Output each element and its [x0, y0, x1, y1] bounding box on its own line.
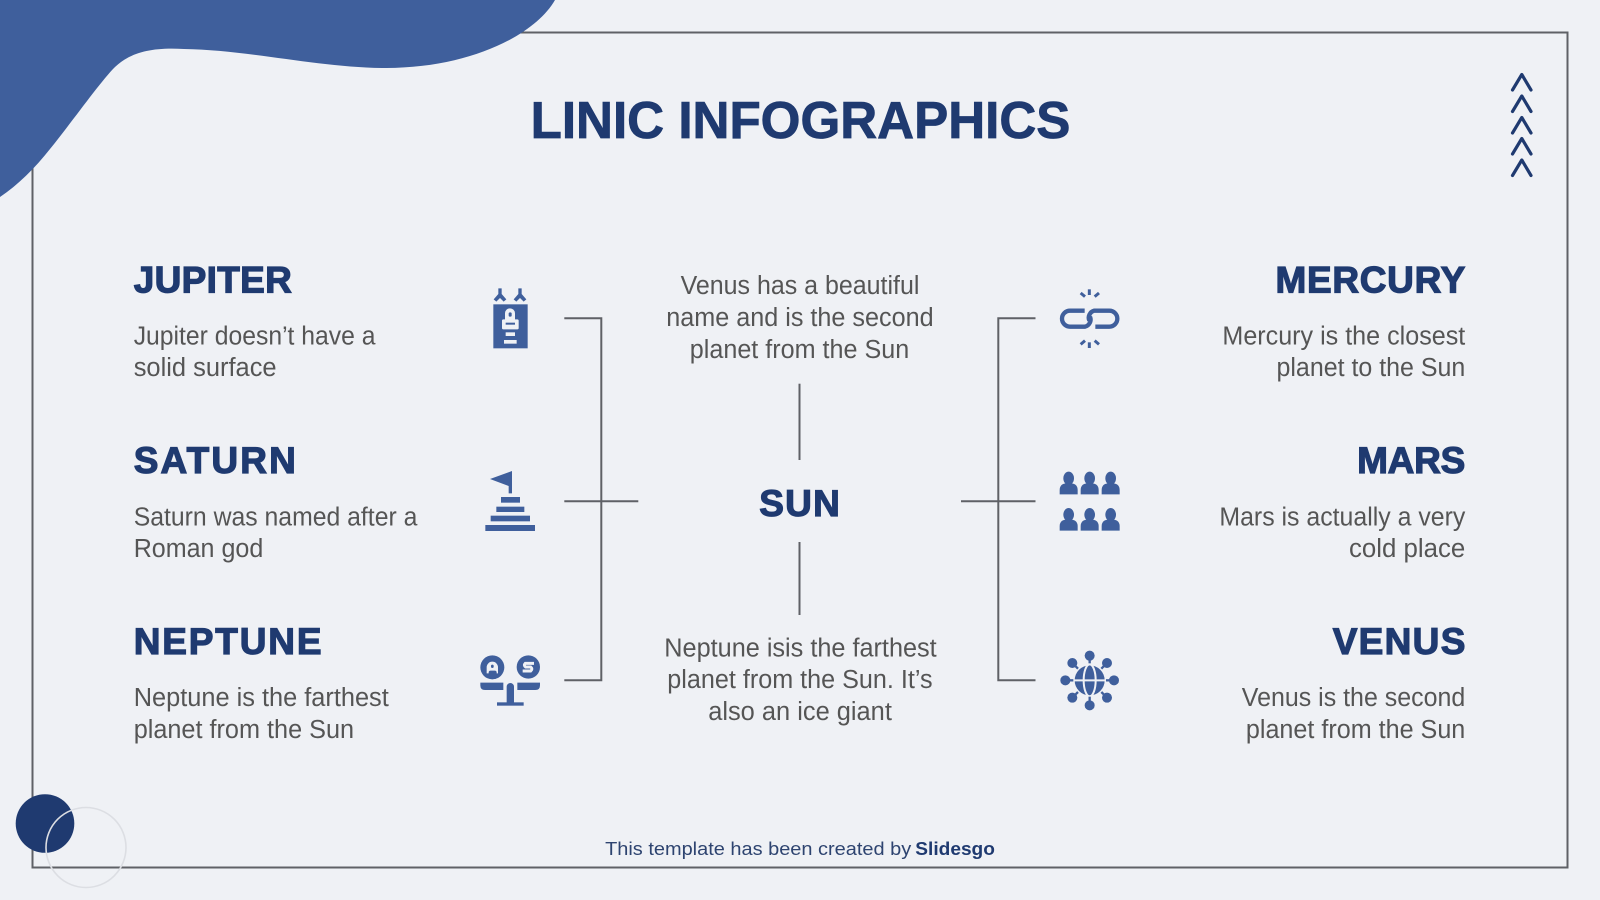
panel: Mercury: Mercury is the closest: [1222, 322, 1465, 350]
panel: Saturn: SATURN: [134, 440, 296, 481]
icon: people group: [1060, 472, 1120, 531]
panel: Mars: MARS: [1357, 440, 1465, 481]
icon: broken link: [1062, 289, 1117, 348]
panel: Neptune: NEPTUNE: [134, 621, 322, 662]
panel: Neptune: planet from the Sun: [134, 716, 354, 744]
footer credit: This template has been created by: [605, 839, 911, 859]
panel: Jupiter: solid surface: [134, 354, 277, 382]
connector: right bracket: [961, 318, 1036, 680]
connector: left bracket: [564, 318, 638, 680]
title: LINIC INFOGRAPHICS: [531, 92, 1070, 150]
decorative blue blob: [0, 0, 555, 197]
text block: center bottom: planet from the Sun. It’s: [667, 666, 933, 694]
panel: Jupiter: JUPITER: [134, 260, 292, 300]
text block: center bottom: [664, 634, 937, 726]
panel: Mars: cold place: [1349, 535, 1465, 563]
decorative dark circle: [16, 794, 74, 853]
text block: center bottom: also an ice giant: [708, 698, 892, 726]
panel: Saturn: [134, 440, 418, 563]
icon: flag podium: [485, 471, 535, 531]
text block: center top: [666, 272, 934, 364]
panel: Mercury: MERCURY: [1276, 260, 1466, 300]
text block: center top: Venus has a beautiful: [681, 272, 919, 300]
panel: Neptune: [134, 621, 389, 744]
footer credit: Slidesgo: [915, 839, 995, 859]
decorative outline circle: [46, 808, 126, 888]
text block: center bottom: Neptune isis the farthest: [664, 634, 937, 662]
panel: Venus: [1242, 621, 1465, 744]
panel: Neptune: Neptune is the farthest: [134, 684, 389, 712]
panel: Jupiter: [134, 260, 376, 382]
panel: Jupiter: Jupiter doesn’t have a: [134, 322, 376, 350]
panel: Mercury: [1222, 260, 1466, 382]
panel: Saturn: Saturn was named after a: [134, 504, 418, 532]
icon: balance scale: [480, 655, 540, 706]
icon: chevrons: [1512, 74, 1531, 176]
panel: Mars: Mars is actually a very: [1219, 504, 1466, 532]
icon: globe network: [1060, 651, 1119, 710]
panel: Venus: planet from the Sun: [1246, 716, 1465, 744]
panel: Mars: [1219, 440, 1466, 563]
icon: badge: [493, 288, 528, 348]
panel: Venus: VENUS: [1333, 621, 1465, 662]
connector: center top line: [798, 384, 800, 460]
panel: Mercury: planet to the Sun: [1276, 354, 1465, 382]
connector: center bottom line: [798, 542, 800, 615]
text block: center top: name and is the second: [666, 304, 934, 332]
heading: Sun: SUN: [759, 483, 840, 524]
text block: center top: planet from the Sun: [690, 336, 909, 364]
panel: Venus: Venus is the second: [1242, 684, 1465, 712]
panel: Saturn: Roman god: [134, 535, 263, 563]
